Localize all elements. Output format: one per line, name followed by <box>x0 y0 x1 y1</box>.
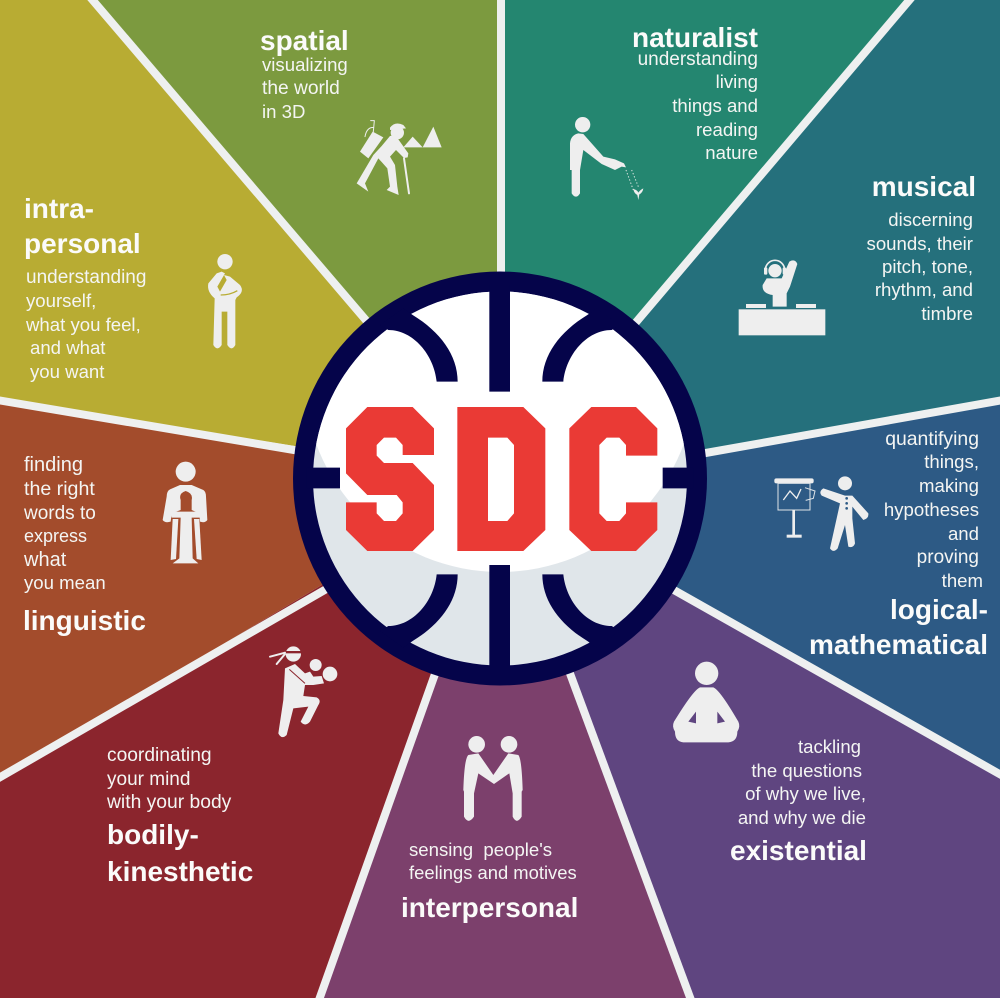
text: naturalist description: reading <box>696 119 758 140</box>
text: logical-mathematical description: and <box>948 523 979 544</box>
text: spatial description: in 3D <box>262 101 305 122</box>
icon: hiker with mountains <box>357 121 442 195</box>
text: logical-mathematical description: making <box>919 475 979 496</box>
panel: musical <box>500 0 1000 489</box>
text: intrapersonal description: yourself, <box>26 290 96 311</box>
icon: two people shaking hands <box>463 736 523 821</box>
heading: intra-personal: intra- <box>24 193 94 224</box>
letter C <box>569 407 657 551</box>
icon: boxer with headband <box>270 646 337 737</box>
icon: speaker at podium <box>163 462 207 563</box>
icon: DJ at turntables <box>739 260 825 335</box>
text: existential description: of why we live, <box>745 783 866 804</box>
panel: naturalist <box>500 0 912 478</box>
text: naturalist description: things and <box>672 95 758 116</box>
letter S <box>346 407 434 551</box>
text: spatial description: the world <box>262 78 340 99</box>
heading: spatial: spatial <box>260 25 349 56</box>
heading: linguistic: linguistic <box>23 605 146 636</box>
panel: logical-mathematical <box>500 400 1000 775</box>
panel: intrapersonal <box>0 0 500 478</box>
logo: inner disc <box>313 292 687 666</box>
heading: logical-mathematical: mathematical <box>809 629 988 660</box>
text: musical description: rhythm, and <box>875 279 973 300</box>
text: intrapersonal description: understanding <box>26 267 146 288</box>
panel: spatial <box>90 0 501 478</box>
logo: navy ring <box>293 272 707 686</box>
text: musical description: sounds, their <box>867 233 973 254</box>
text: bodily-kinesthetic description: with your body <box>106 792 232 813</box>
text: linguistic description: you mean <box>24 572 106 593</box>
text: logical-mathematical description: things, <box>924 451 979 472</box>
text: naturalist description: nature <box>705 142 758 163</box>
text: musical description: pitch, tone, <box>882 256 973 277</box>
icon: thinking person <box>208 254 242 348</box>
heading: bodily-kinesthetic: bodily- <box>107 819 199 850</box>
heading: bodily-kinesthetic: kinesthetic <box>107 856 253 887</box>
text: intrapersonal description: what you feel, <box>25 314 141 335</box>
text: linguistic description: words to <box>23 503 96 524</box>
text: intrapersonal description: you want <box>30 361 105 382</box>
icon: person watering plant <box>570 117 643 200</box>
text: interpersonal description: feelings and motives <box>409 862 577 883</box>
panel: interpersonal <box>320 478 690 998</box>
letter D <box>457 407 545 551</box>
logo: SDC basketball <box>293 272 707 686</box>
text: linguistic description: finding <box>24 454 83 476</box>
text: linguistic description: the right <box>24 478 95 500</box>
icon: meditating person <box>673 662 739 742</box>
text: existential description: the questions <box>751 760 862 781</box>
text: linguistic description: express <box>24 526 87 546</box>
text: existential description: and why we die <box>738 807 866 828</box>
heading: interpersonal: interpersonal <box>401 892 578 923</box>
text: linguistic description: what <box>23 549 67 571</box>
text: interpersonal description: sensing people's <box>409 839 552 860</box>
heading: naturalist: naturalist <box>632 22 758 53</box>
panel: existential <box>500 478 1000 998</box>
panel: bodily-kinesthetic <box>0 478 500 998</box>
logo: seams and letters <box>307 285 693 670</box>
text: logical-mathematical description: quantifying <box>885 428 979 450</box>
text: musical description: discerning <box>888 209 973 230</box>
text: intrapersonal description: and what <box>30 337 106 358</box>
heading: existential: existential <box>730 835 867 866</box>
text: musical description: timbre <box>921 303 973 324</box>
text: bodily-kinesthetic description: your mind <box>107 769 190 790</box>
text: logical-mathematical description: proving <box>917 547 979 568</box>
text: naturalist description: understanding <box>638 49 758 70</box>
heading: intra-personal: personal <box>24 228 141 259</box>
text: logical-mathematical description: them <box>942 570 983 591</box>
text: naturalist description: living <box>716 71 758 92</box>
heading: logical-mathematical: logical- <box>890 594 988 625</box>
text: spatial description: visualizing <box>262 54 348 75</box>
text: bodily-kinesthetic description: coordinating <box>107 745 212 766</box>
text: logical-mathematical description: hypotheses <box>884 499 979 520</box>
text: existential description: tackling <box>798 736 861 757</box>
heading: musical: musical <box>872 171 976 202</box>
icon: presenter with chart board <box>774 476 868 551</box>
panel: linguistic <box>0 400 500 778</box>
